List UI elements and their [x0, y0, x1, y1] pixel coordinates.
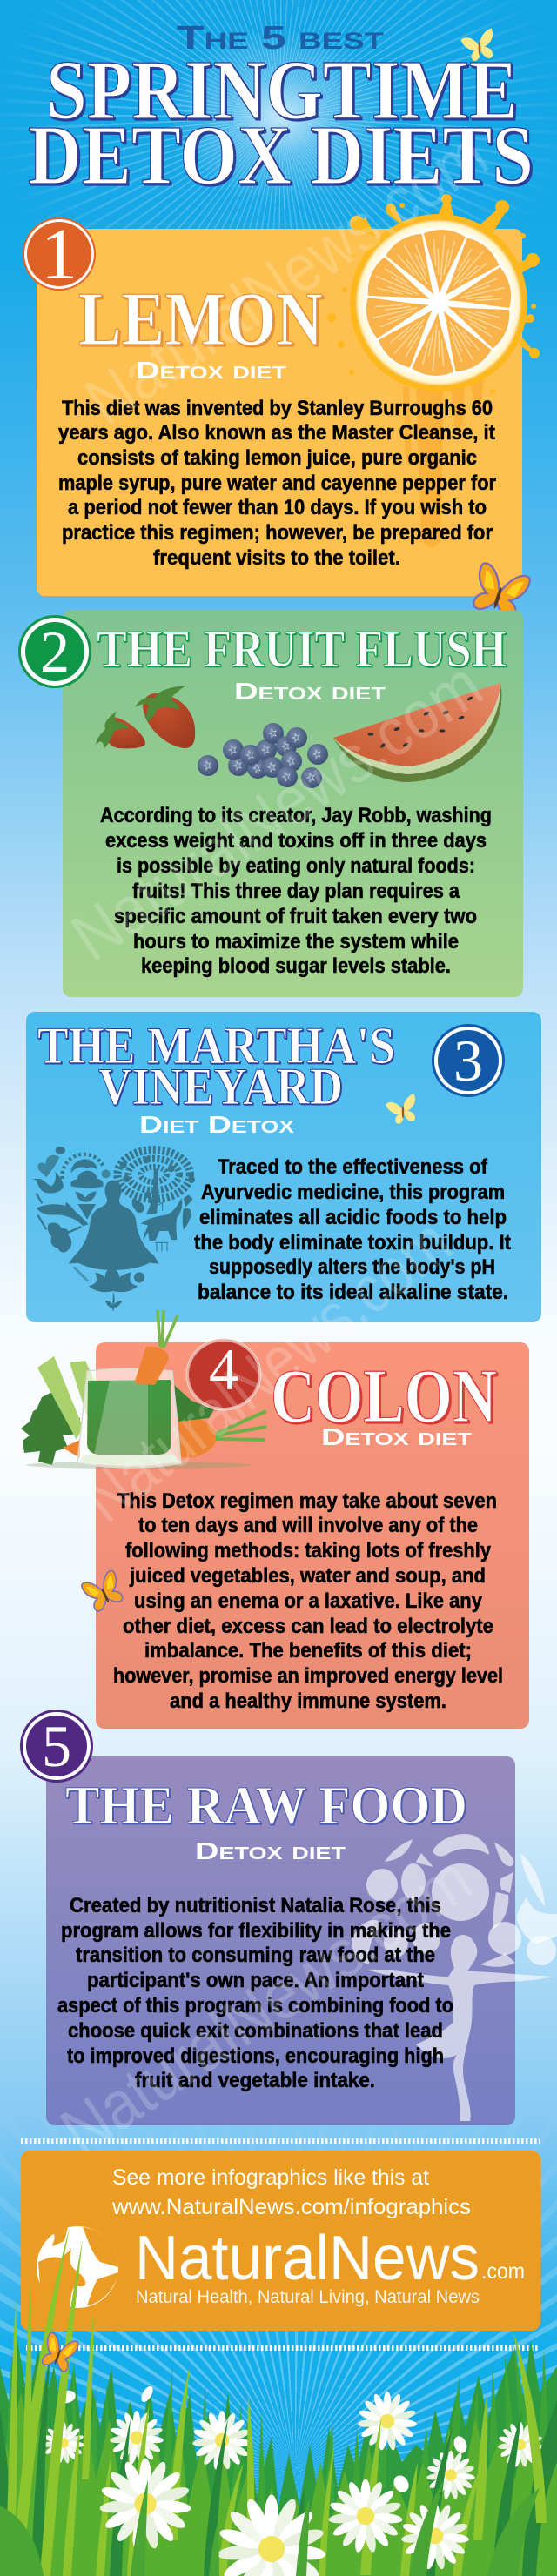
butterfly	[37, 1155, 59, 1177]
divider dots lower	[26, 2345, 540, 2351]
background sun rays: top	[5, 0, 555, 229]
flowers front row	[99, 2459, 469, 2576]
clover	[134, 1272, 144, 1282]
body text: Created by nutritionist Natalia Rose, this	[70, 1894, 441, 1917]
grass blades: dark	[0, 2349, 557, 2576]
subheading: Diet Detox	[139, 1111, 295, 1138]
body text: keeping blood sugar levels stable.	[141, 954, 451, 978]
body text: eliminates all acidic foods to help	[199, 1206, 507, 1229]
background sun rays: bottom	[0, 2162, 557, 2506]
bird	[32, 1172, 64, 1194]
chili	[520, 1853, 545, 1907]
body text: program allows for flexibility in making the	[61, 1919, 451, 1943]
squash	[352, 1920, 383, 1964]
grass blades: bright	[7, 2227, 547, 2576]
watermarks: NaturalNews.com	[47, 1840, 485, 2170]
body text: practice this regimen; however, be prepared for	[62, 521, 493, 545]
illustration: grass and daisies	[0, 2227, 557, 2576]
body text: imbalance. The benefits of this diet;	[144, 1639, 472, 1663]
body text: years ago. Also known as the Master Cleanse, it	[58, 421, 495, 445]
background glow	[0, 0, 557, 261]
body text	[58, 397, 496, 570]
icon: parsley right	[174, 1385, 214, 1422]
body text: juiced vegetables, water and soup, and	[129, 1564, 486, 1588]
heading: Colon: COLON	[271, 1355, 497, 1439]
body text: other diet, excess can lead to electrolyte	[123, 1615, 493, 1638]
number badge 5	[20, 1710, 93, 1783]
watermarks: NaturalNews.com	[68, 1203, 465, 1536]
icon: parsley	[21, 1392, 80, 1465]
footer line 1: See more infographics like this at	[112, 2165, 429, 2190]
body text: According to its creator, Jay Robb, washing	[100, 804, 492, 827]
tomato	[488, 1922, 521, 1955]
glass shadow	[26, 1462, 252, 1469]
body text: Traced to the effectiveness of	[218, 1155, 488, 1179]
number badge 5: 5	[42, 1713, 71, 1779]
icon: heart of nature with meditating figure	[32, 1147, 195, 1311]
body text: aspect of this program is combining food to	[57, 1994, 453, 2017]
wheat	[74, 1268, 89, 1281]
icon: lemon drips	[403, 379, 484, 547]
juice highlight	[94, 1380, 148, 1455]
body text: maple syrup, pure water and cayenne pepper for	[58, 472, 496, 495]
icon: yellow butterfly top	[460, 28, 493, 61]
watermarks	[47, 116, 500, 2170]
icon: orange butterfly by panel 4	[81, 1569, 126, 1614]
body text	[100, 804, 492, 978]
illustration: green juice with vegetables	[21, 1310, 266, 1469]
heading: The Martha's Vineyard: VINEYARD	[98, 1058, 343, 1115]
flowers back row	[43, 2385, 543, 2499]
heading: The Raw Food: THE RAW FOOD	[65, 1776, 467, 1836]
elephant	[141, 1198, 182, 1241]
music notes	[155, 1202, 168, 1251]
flower star	[102, 1169, 111, 1178]
subheading: Detox diet	[195, 1837, 346, 1864]
heading: The Martha's Vineyard	[37, 1017, 395, 1115]
footer background	[21, 2151, 540, 2331]
logo: tagline: Natural Health, Natural Living, Natural News	[136, 2287, 480, 2307]
panel background	[46, 1756, 515, 2125]
number badge 2	[18, 615, 91, 688]
hibiscus	[48, 1222, 71, 1253]
panel: raw food	[20, 1710, 557, 2125]
panel: colon detox	[21, 1310, 529, 1729]
subheading: Detox diet	[234, 678, 386, 705]
number badge 3: 3	[453, 1027, 483, 1094]
body text: fruits! This three day plan requires a	[132, 880, 460, 903]
icon: lemon splash	[327, 194, 540, 394]
beet and leaves	[517, 1897, 557, 1944]
body text: however, promise an improved energy level	[113, 1664, 503, 1688]
panel background	[26, 1012, 541, 1322]
body text: supposedly alters the body's pH	[209, 1255, 495, 1279]
body text: participant's own pace. An important	[87, 1969, 424, 1992]
body text: fruit and vegetable intake.	[135, 2069, 375, 2092]
mango	[401, 1863, 426, 1900]
tree	[117, 1150, 190, 1199]
small heart	[56, 1147, 65, 1154]
icon: lemon slice	[355, 219, 522, 386]
panel background	[37, 229, 522, 596]
lotus	[89, 1267, 138, 1292]
apple	[366, 1869, 398, 1902]
pear	[494, 1843, 513, 1866]
heading: Lemon: LEMON	[78, 278, 323, 362]
icon: carrot behind glass right	[178, 1415, 218, 1458]
body text: hours to maximize the system while	[133, 930, 459, 953]
body text: balance to its ideal alkaline state.	[198, 1281, 508, 1304]
heading: The Fruit Flush: THE FRUIT FLUSH	[97, 620, 507, 678]
body text	[113, 1489, 503, 1713]
icon: glass	[77, 1368, 181, 1468]
body text	[194, 1155, 511, 1304]
panel background	[96, 1342, 529, 1729]
logo: globe	[37, 2226, 118, 2308]
icon: blueberries	[198, 723, 328, 788]
icon: strawberries	[96, 686, 195, 748]
body text: using an enema or a laxative. Like any	[134, 1589, 483, 1613]
body text: the body eliminate toxin buildup. It	[194, 1231, 511, 1255]
glass base highlight	[80, 1455, 179, 1466]
body text: transition to consuming raw food at the	[76, 1944, 435, 1967]
body text: frequent visits to the toilet.	[153, 546, 400, 570]
panel: lemon detox	[23, 194, 540, 596]
dancer	[366, 1935, 554, 2121]
silhouette: dancer with fruit and vegetables	[352, 1834, 557, 2121]
icon: celery	[37, 1356, 96, 1440]
body text: This Detox regimen may take about seven	[117, 1489, 497, 1513]
icon: carrot in glass	[134, 1347, 169, 1385]
grapes	[77, 1204, 96, 1220]
subheading: Detox diet	[136, 357, 286, 384]
panel background	[63, 610, 523, 997]
icon: carrot tip left	[63, 1440, 80, 1458]
small butterfly	[132, 1198, 144, 1213]
carrot	[183, 1194, 193, 1229]
number badge 4	[186, 1336, 261, 1410]
number badge 4: 4	[209, 1336, 238, 1402]
logo: wordmark: NaturalNews	[135, 2224, 480, 2293]
logo: dot com: .com	[481, 2259, 525, 2284]
body text	[57, 1894, 453, 2092]
icon: orange butterfly on panel 1	[468, 562, 531, 621]
carrot	[493, 1872, 513, 1930]
subheading: Detox diet	[321, 1423, 472, 1450]
footer line 2: www.NaturalNews.com/infographics	[111, 2195, 471, 2219]
body text: to improved digestions, encouraging high	[67, 2044, 444, 2068]
heading: The Martha's Vineyard: THE MARTHA'S	[37, 1017, 395, 1074]
turnip	[480, 1953, 515, 1967]
cauliflower	[432, 1863, 489, 1921]
number badge 1	[23, 214, 96, 295]
sprig	[105, 1292, 123, 1311]
body text: is possible by eating only natural foods:	[117, 854, 475, 878]
sun	[71, 1160, 97, 1173]
kicker: The 5 best: The 5 best	[177, 20, 385, 57]
leaves	[385, 1839, 433, 1867]
body text: consists of taking lemon juice, pure organic	[77, 446, 477, 470]
body text: following methods: taking lots of freshly	[125, 1539, 492, 1562]
dolphin	[37, 1202, 89, 1226]
grass blades: foreground	[0, 2479, 540, 2576]
cucumber	[433, 1834, 489, 1857]
cloud	[70, 1171, 104, 1188]
number badge 1: 1	[41, 214, 77, 295]
watermarks: NaturalNews.com	[57, 646, 495, 975]
number badge 3	[432, 1024, 505, 1097]
body text: a period not fewer than 10 days. If you wish to	[68, 496, 487, 519]
panel: Martha's Vineyard	[26, 1012, 541, 1322]
body text: This diet was invented by Stanley Burroughs 60	[62, 397, 493, 420]
divider dots upper	[21, 2138, 540, 2144]
body text: to ten days and will involve any of the	[138, 1514, 478, 1537]
number badge 2: 2	[40, 619, 70, 685]
icon: orange butterfly in grass	[39, 2332, 79, 2373]
icon: yellow butterfly	[386, 1094, 415, 1124]
leaves over grapes	[76, 1191, 97, 1202]
panel: footer call to action	[21, 2151, 540, 2331]
grass back layer	[0, 2340, 557, 2576]
panel: fruit flush	[18, 610, 523, 997]
grass narrow blades behind	[4, 2340, 550, 2514]
body text: specific amount of fruit taken every two	[114, 905, 477, 928]
title	[28, 20, 534, 202]
body text: excess weight and toxins off in three days	[105, 829, 487, 853]
body text: choose quick exit combinations that lead	[68, 2019, 443, 2043]
meditating figure	[69, 1181, 159, 1270]
body text: Ayurvedic medicine, this program	[201, 1181, 505, 1204]
watermarks: NaturalNews.com	[71, 116, 500, 439]
icon: juice	[87, 1380, 171, 1455]
body text: and a healthy immune system.	[170, 1689, 446, 1713]
icon: watermelon	[333, 683, 501, 782]
grass middle layer	[0, 2392, 557, 2576]
